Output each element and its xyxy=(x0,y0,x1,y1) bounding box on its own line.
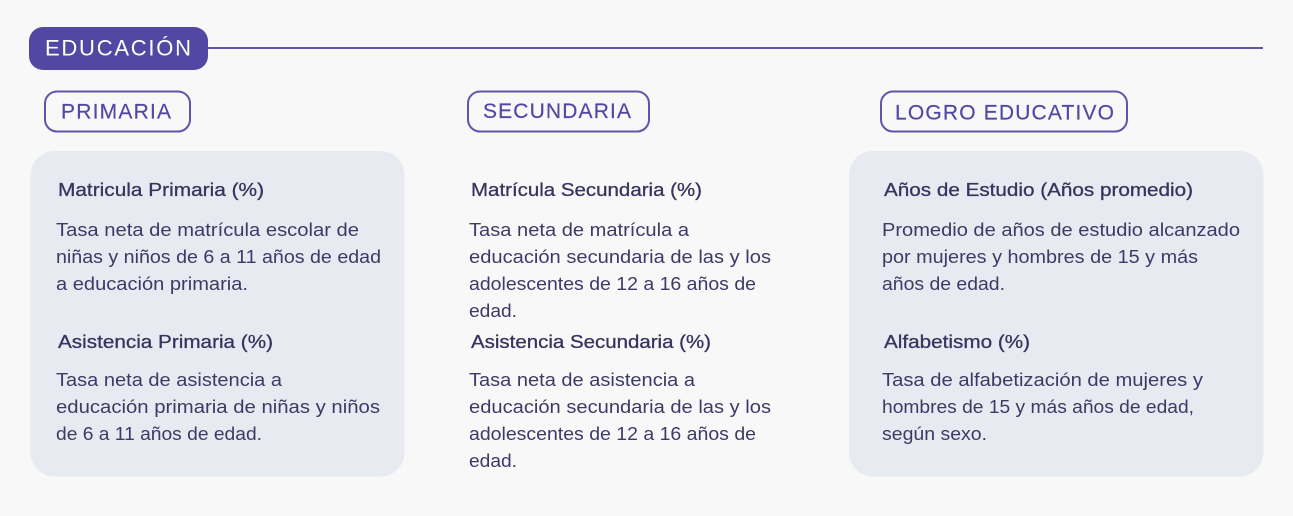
text block: Años de Estudio: Promedio de años de estudio alcanzado xyxy=(882,219,1240,240)
text block: Asistencia Secundaria: adolescentes de 12 a 16 años de xyxy=(469,423,756,444)
text block: Matricula Primaria: Matricula Primaria (%) xyxy=(58,179,264,200)
text block: Años de Estudio: años de edad. xyxy=(882,273,1005,294)
heading: Logro educativo xyxy=(881,92,1127,132)
heading: Primaria xyxy=(45,92,190,132)
panel: primaria xyxy=(30,151,404,476)
text block: Asistencia Secundaria xyxy=(469,331,771,471)
text block: Asistencia Secundaria: edad. xyxy=(469,450,517,471)
text block: Matricula Primaria: Tasa neta de matrícula escolar de xyxy=(56,219,359,240)
text block: Alfabetismo: según sexo. xyxy=(882,423,987,444)
text block: Años de Estudio: Años de Estudio (Años promedio) xyxy=(884,179,1193,200)
title: Educación xyxy=(29,27,208,70)
text block: Años de Estudio xyxy=(882,179,1240,294)
text block: Matricula Primaria: a educación primaria. xyxy=(56,273,248,294)
heading: Secundaria xyxy=(468,92,649,132)
text block: Asistencia Secundaria: Tasa neta de asistencia a xyxy=(469,369,696,390)
text block: Asistencia Primaria: educación primaria de niñas y niños xyxy=(56,396,380,417)
text block: Asistencia Secundaria: Asistencia Secundaria (%) xyxy=(471,331,711,352)
text block: Matrícula Secundaria: adolescentes de 12 a 16 años de xyxy=(469,273,756,294)
text block: Matricula Primaria: niñas y niños de 6 a 11 años de edad xyxy=(56,246,381,267)
text block: Asistencia Primaria: Asistencia Primaria (%) xyxy=(58,331,273,352)
text block: Matrícula Secundaria: Matrícula Secundaria (%) xyxy=(471,179,702,200)
heading: Logro educativo: LOGRO EDUCATIVO xyxy=(895,102,1114,124)
heading: Secundaria: SECUNDARIA xyxy=(483,100,631,123)
text block: Asistencia Secundaria: educación secundaria de las y los xyxy=(469,396,771,417)
title: Educación: EDUCACIÓN xyxy=(45,36,191,60)
text block: Matrícula Secundaria: educación secundaria de las y los xyxy=(469,246,771,267)
text block: Matrícula Secundaria: Tasa neta de matrícula a xyxy=(469,219,690,240)
panel: logro educativo xyxy=(849,151,1264,476)
text block: Alfabetismo: Tasa de alfabetización de mujeres y xyxy=(882,369,1204,390)
text block: Alfabetismo: Alfabetismo (%) xyxy=(884,331,1030,352)
text block: Asistencia Primaria xyxy=(56,331,380,444)
heading: Primaria: PRIMARIA xyxy=(61,100,171,124)
text block: Alfabetismo: hombres de 15 y más años de edad, xyxy=(882,396,1194,417)
text block: Años de Estudio: por mujeres y hombres de 15 y más xyxy=(882,246,1198,267)
panel: secundaria xyxy=(469,179,771,471)
text block: Alfabetismo xyxy=(882,331,1204,444)
text block: Matrícula Secundaria xyxy=(469,179,771,321)
text block: Asistencia Primaria: de 6 a 11 años de edad. xyxy=(56,423,262,444)
text block: Asistencia Primaria: Tasa neta de asistencia a xyxy=(56,369,283,390)
text block: Matricula Primaria xyxy=(56,179,381,294)
text block: Matrícula Secundaria: edad. xyxy=(469,300,517,321)
